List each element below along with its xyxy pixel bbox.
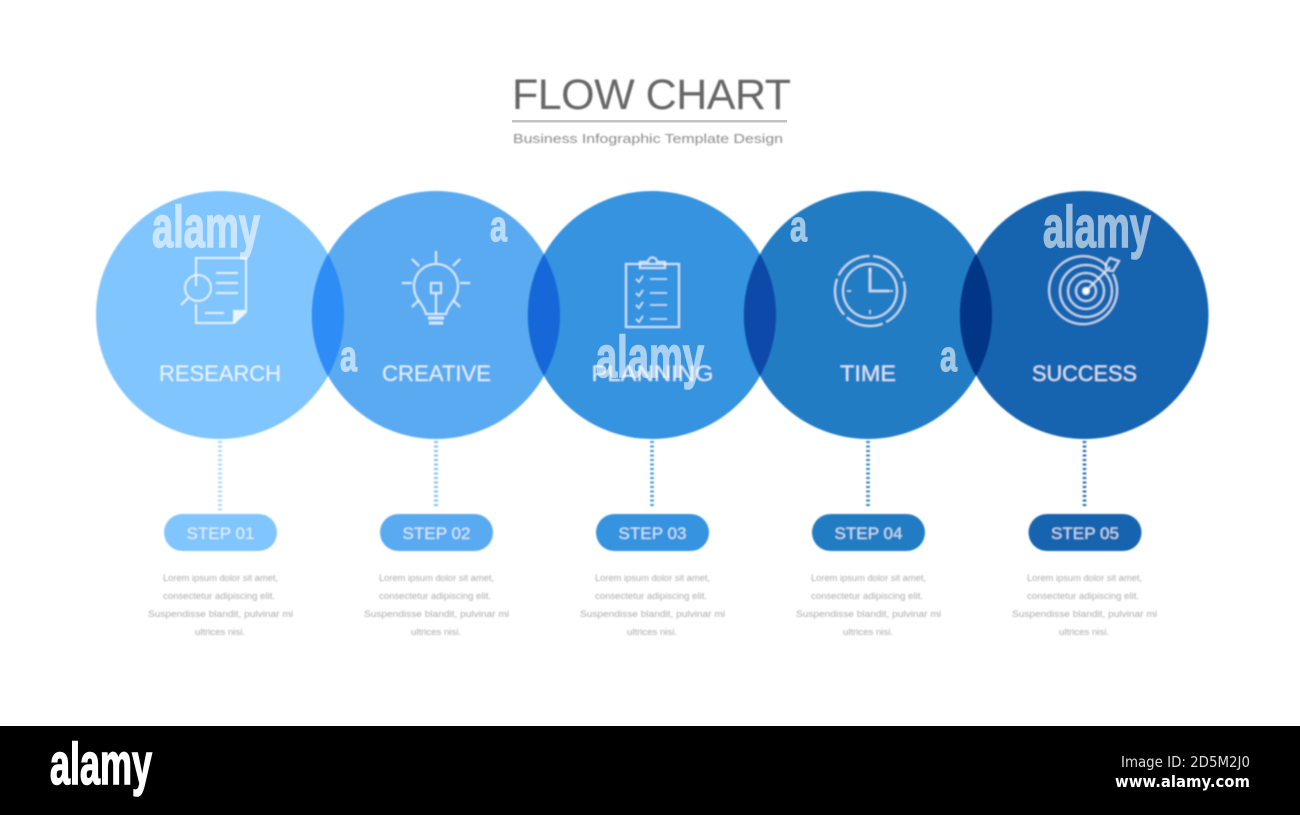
connector 2 [434,441,438,506]
title: FLOW CHART [512,71,791,119]
watermarks: a [340,332,357,381]
description 4: ultrices nisi. [843,627,893,637]
icon: target [1049,256,1119,324]
connector 4 [866,441,870,506]
pill: step 02 [380,514,493,551]
description 2 [364,573,509,637]
description 2: Lorem ipsum dolor sit amet, [379,573,494,583]
pill: step 04 [812,514,925,551]
step 4: time [744,191,992,637]
footer logo: alamy [50,732,152,797]
icon: document with magnifier [181,258,246,323]
description 1: consectetur adipiscing elit. [163,591,275,601]
connector 3 [650,441,654,506]
pill: step 03 [596,514,709,551]
image id: Image ID: 2D5M2J0 [1121,753,1250,771]
watermarks: alamy [152,195,260,260]
description 4: consectetur adipiscing elit. [811,591,923,601]
description 3: Lorem ipsum dolor sit amet, [595,573,710,583]
description 5: ultrices nisi. [1059,627,1109,637]
circle 3 [528,191,776,439]
circle 4 [744,191,992,439]
description 2: Suspendisse blandit, pulvinar mi [364,609,509,619]
step 2: creative [312,191,560,637]
label: creative: CREATIVE [382,361,491,386]
pill: step 01: STEP 01 [186,524,254,543]
description 2: ultrices nisi. [411,627,461,637]
watermarks: alamy [596,325,704,390]
label: time: TIME [840,361,896,386]
circle overlaps [312,254,992,376]
circle 1 [96,191,344,439]
watermarks: alamy [1043,195,1151,260]
description 3: Suspendisse blandit, pulvinar mi [580,609,725,619]
pill: step 02: STEP 02 [402,524,470,543]
label: success: SUCCESS [1032,361,1137,386]
watermarks: a [940,332,957,381]
description 4 [796,573,941,637]
step 1: research [96,191,344,637]
description 3: consectetur adipiscing elit. [595,591,707,601]
pill: step 05: STEP 05 [1051,524,1119,543]
pill: step 05 [1028,514,1142,551]
description 1 [148,573,293,637]
pill: step 04: STEP 04 [834,524,902,543]
label: planning: PLANNING [592,361,714,386]
pill: step 03: STEP 03 [618,524,686,543]
pill: step 01 [164,514,277,551]
watermarks: a [490,202,507,251]
icon: clipboard [626,258,679,327]
label: research: RESEARCH [159,361,281,386]
icon: light bulb [402,251,470,323]
description 1: Lorem ipsum dolor sit amet, [163,573,278,583]
step 5: success [960,191,1208,637]
description 5 [1012,573,1157,637]
description 1: ultrices nisi. [195,627,245,637]
description 5: Lorem ipsum dolor sit amet, [1027,573,1142,583]
connector 5 [1083,441,1086,506]
connector 1 [218,441,222,511]
circle 5 [960,191,1208,439]
circle 2 [312,191,560,439]
step 3: planning [528,191,776,637]
footer bar [0,726,1300,815]
description 4: Suspendisse blandit, pulvinar mi [796,609,941,619]
description 5: consectetur adipiscing elit. [1027,591,1139,601]
description 3: ultrices nisi. [627,627,677,637]
subtitle: Business Infographic Template Design [513,131,783,146]
description 5: Suspendisse blandit, pulvinar mi [1012,609,1157,619]
website: www.alamy.com [1115,772,1250,791]
watermarks: a [790,202,807,251]
description 2: consectetur adipiscing elit. [379,591,491,601]
icon: clock [835,256,905,326]
description 4: Lorem ipsum dolor sit amet, [811,573,926,583]
watermarks [152,195,1151,390]
description 1: Suspendisse blandit, pulvinar mi [148,609,293,619]
description 3 [580,573,725,637]
